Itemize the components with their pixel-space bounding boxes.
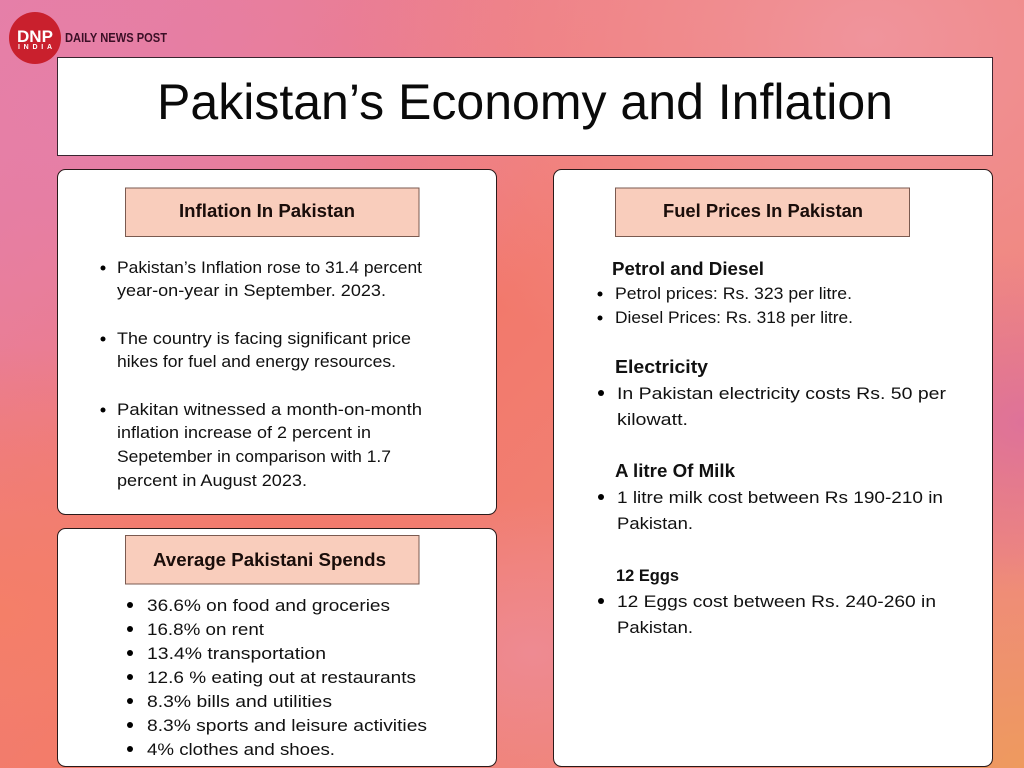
inflation bullet list: percent in August 2023. [117,471,307,490]
spending bullet list: 36.6% on food and groceries [147,596,390,615]
title panel [58,58,992,156]
inflation bullet list: year-on-year in September. 2023. [117,281,386,300]
heading: fuel prices in Pakistan [616,188,910,236]
petrol and diesel [598,259,853,327]
title: Pakistan’s Economy and Inflation [157,74,893,130]
a litre of milk: Pakistan. [617,514,693,533]
petrol and diesel: Petrol prices: Rs. 323 per litre. [615,284,852,303]
12 eggs: Pakistan. [617,618,693,637]
spending bullet list: 8.3% sports and leisure activities [147,716,427,735]
heading: inflation in Pakistan: Inflation In Pakistan [179,201,355,221]
spending bullet list: 12.6 % eating out at restaurants [147,668,416,687]
spending bullet list: 4% clothes and shoes. [147,740,335,759]
spending bullet list: 13.4% transportation [147,644,326,663]
12 eggs: 12 Eggs [616,566,679,585]
inflation bullet list: The country is facing significant price [117,329,411,348]
heading: average Pakistani spends [126,536,419,584]
logo: DNP India: DNP [17,27,53,46]
inflation bullet list: inflation increase of 2 percent in [117,423,371,442]
spending bullet list: 16.8% on rent [147,620,264,639]
panel: average Pakistani spends [58,528,496,766]
electricity: In Pakistan electricity costs Rs. 50 per [617,384,946,403]
petrol and diesel: Petrol and Diesel [612,259,764,279]
inflation bullet list: Sepetember in comparison with 1.7 [117,447,391,466]
brand name: DAILY NEWS POST [65,31,167,45]
electricity [598,357,946,429]
panel: fuel prices in Pakistan [554,170,992,766]
heading: fuel prices in Pakistan: Fuel Prices In Pakistan [663,201,863,221]
petrol and diesel: Diesel Prices: Rs. 318 per litre. [615,308,853,327]
electricity: kilowatt. [617,410,688,429]
spending bullet list [127,596,427,759]
panel: inflation in Pakistan [58,170,496,514]
logo: DNP India: INDIA [18,44,52,51]
spending bullet list: 8.3% bills and utilities [147,692,332,711]
inflation bullet list: hikes for fuel and energy resources. [117,352,396,371]
heading: average Pakistani spends: Average Pakistani Spends [153,550,386,570]
inflation bullet list [100,258,422,490]
a litre of milk: A litre Of Milk [615,461,736,481]
inflation bullet list: Pakistan’s Inflation rose to 31.4 percent [117,258,422,277]
a litre of milk [598,461,943,533]
heading: inflation in Pakistan [126,188,419,236]
logo: DNP India [9,12,61,64]
12 eggs: 12 Eggs cost between Rs. 240-260 in [617,592,936,611]
inflation bullet list: Pakitan witnessed a month-on-month [117,400,422,419]
a litre of milk: 1 litre milk cost between Rs 190-210 in [617,488,943,507]
12 eggs [598,566,936,637]
electricity: Electricity [615,357,708,377]
